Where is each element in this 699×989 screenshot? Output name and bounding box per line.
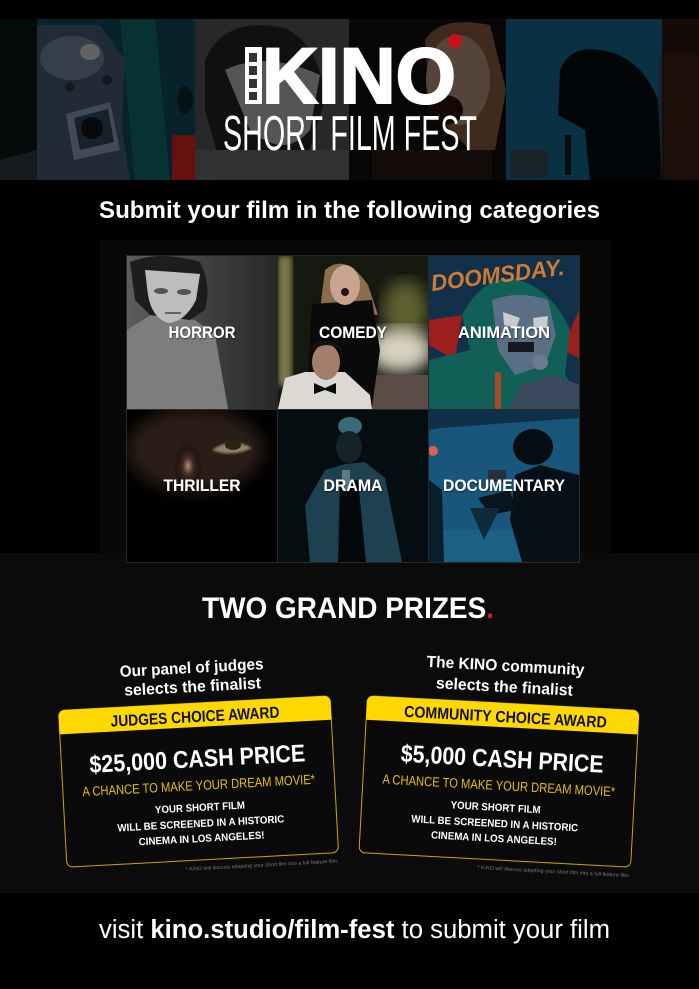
prize amount: $25,000 CASH PRICE bbox=[89, 740, 306, 779]
gold tagline: A CHANCE TO MAKE YOUR DREAM MOVIE* bbox=[382, 772, 616, 799]
label: thriller: THRILLER bbox=[164, 477, 241, 495]
footnote: * KINO will discuss adapting your short film into a full feature film. bbox=[477, 865, 630, 879]
category: documentary bbox=[428, 410, 579, 562]
text: judges intro: Our panel of judges bbox=[119, 656, 264, 681]
text: judges intro bbox=[119, 656, 265, 700]
label: animation: ANIMATION bbox=[458, 324, 550, 342]
card body text bbox=[410, 797, 580, 849]
text: community intro: The KINO community bbox=[426, 654, 585, 679]
category: drama bbox=[278, 410, 428, 562]
gold tagline: A CHANCE TO MAKE YOUR DREAM MOVIE* bbox=[82, 772, 316, 799]
category: animation bbox=[429, 254, 579, 409]
icon: red dot on logo bbox=[448, 34, 462, 48]
award name: COMMUNITY CHOICE AWARD bbox=[404, 704, 607, 732]
label: drama: DRAMA bbox=[324, 477, 383, 495]
logo: KINO: KINO bbox=[262, 31, 456, 120]
card header bbox=[366, 696, 639, 734]
card body text: CINEMA IN LOS ANGELES! bbox=[431, 829, 557, 848]
card body text: WILL BE SCREENED IN A HISTORIC bbox=[411, 813, 579, 834]
award name: JUDGES CHOICE AWARD bbox=[110, 705, 280, 731]
logo subtitle: SHORT FILM FEST bbox=[223, 107, 477, 161]
panel: lower prizes background bbox=[0, 553, 699, 893]
footer call to action: visit kino.studio/film-fest to submit your film bbox=[99, 916, 610, 944]
card body text: CINEMA IN LOS ANGELES! bbox=[138, 830, 265, 848]
panel: banner bbox=[0, 19, 699, 180]
category: comedy bbox=[278, 256, 432, 409]
card: judges choice award bbox=[58, 696, 339, 879]
card body text: WILL BE SCREENED IN A HISTORIC bbox=[117, 813, 285, 834]
card body text bbox=[116, 797, 286, 849]
heading: categories: Submit your film in the following categories bbox=[99, 197, 600, 224]
panel: category grid bbox=[126, 254, 580, 563]
category: thriller bbox=[127, 408, 277, 562]
panel: categories backdrop bbox=[100, 240, 610, 553]
card header bbox=[58, 696, 331, 734]
category: horror bbox=[127, 256, 248, 409]
text: community intro bbox=[425, 654, 585, 700]
card: community choice award bbox=[358, 696, 639, 879]
text: judges intro: selects the finalist bbox=[124, 675, 262, 700]
animation cover title: DOOMSDAY. bbox=[429, 254, 566, 296]
card body text: YOUR SHORT FILM bbox=[450, 799, 541, 816]
heading: two grand prizes: TWO GRAND PRIZES. bbox=[202, 592, 494, 625]
label: documentary: DOCUMENTARY bbox=[443, 477, 565, 495]
label: comedy: COMEDY bbox=[319, 324, 387, 342]
label: horror: HORROR bbox=[168, 324, 236, 342]
footnote: * KINO will discuss adapting your short film into a full feature film. bbox=[186, 859, 339, 873]
prize amount: $5,000 CASH PRICE bbox=[400, 741, 604, 779]
card body text: YOUR SHORT FILM bbox=[155, 800, 245, 816]
text: community intro: selects the finalist bbox=[436, 675, 574, 700]
